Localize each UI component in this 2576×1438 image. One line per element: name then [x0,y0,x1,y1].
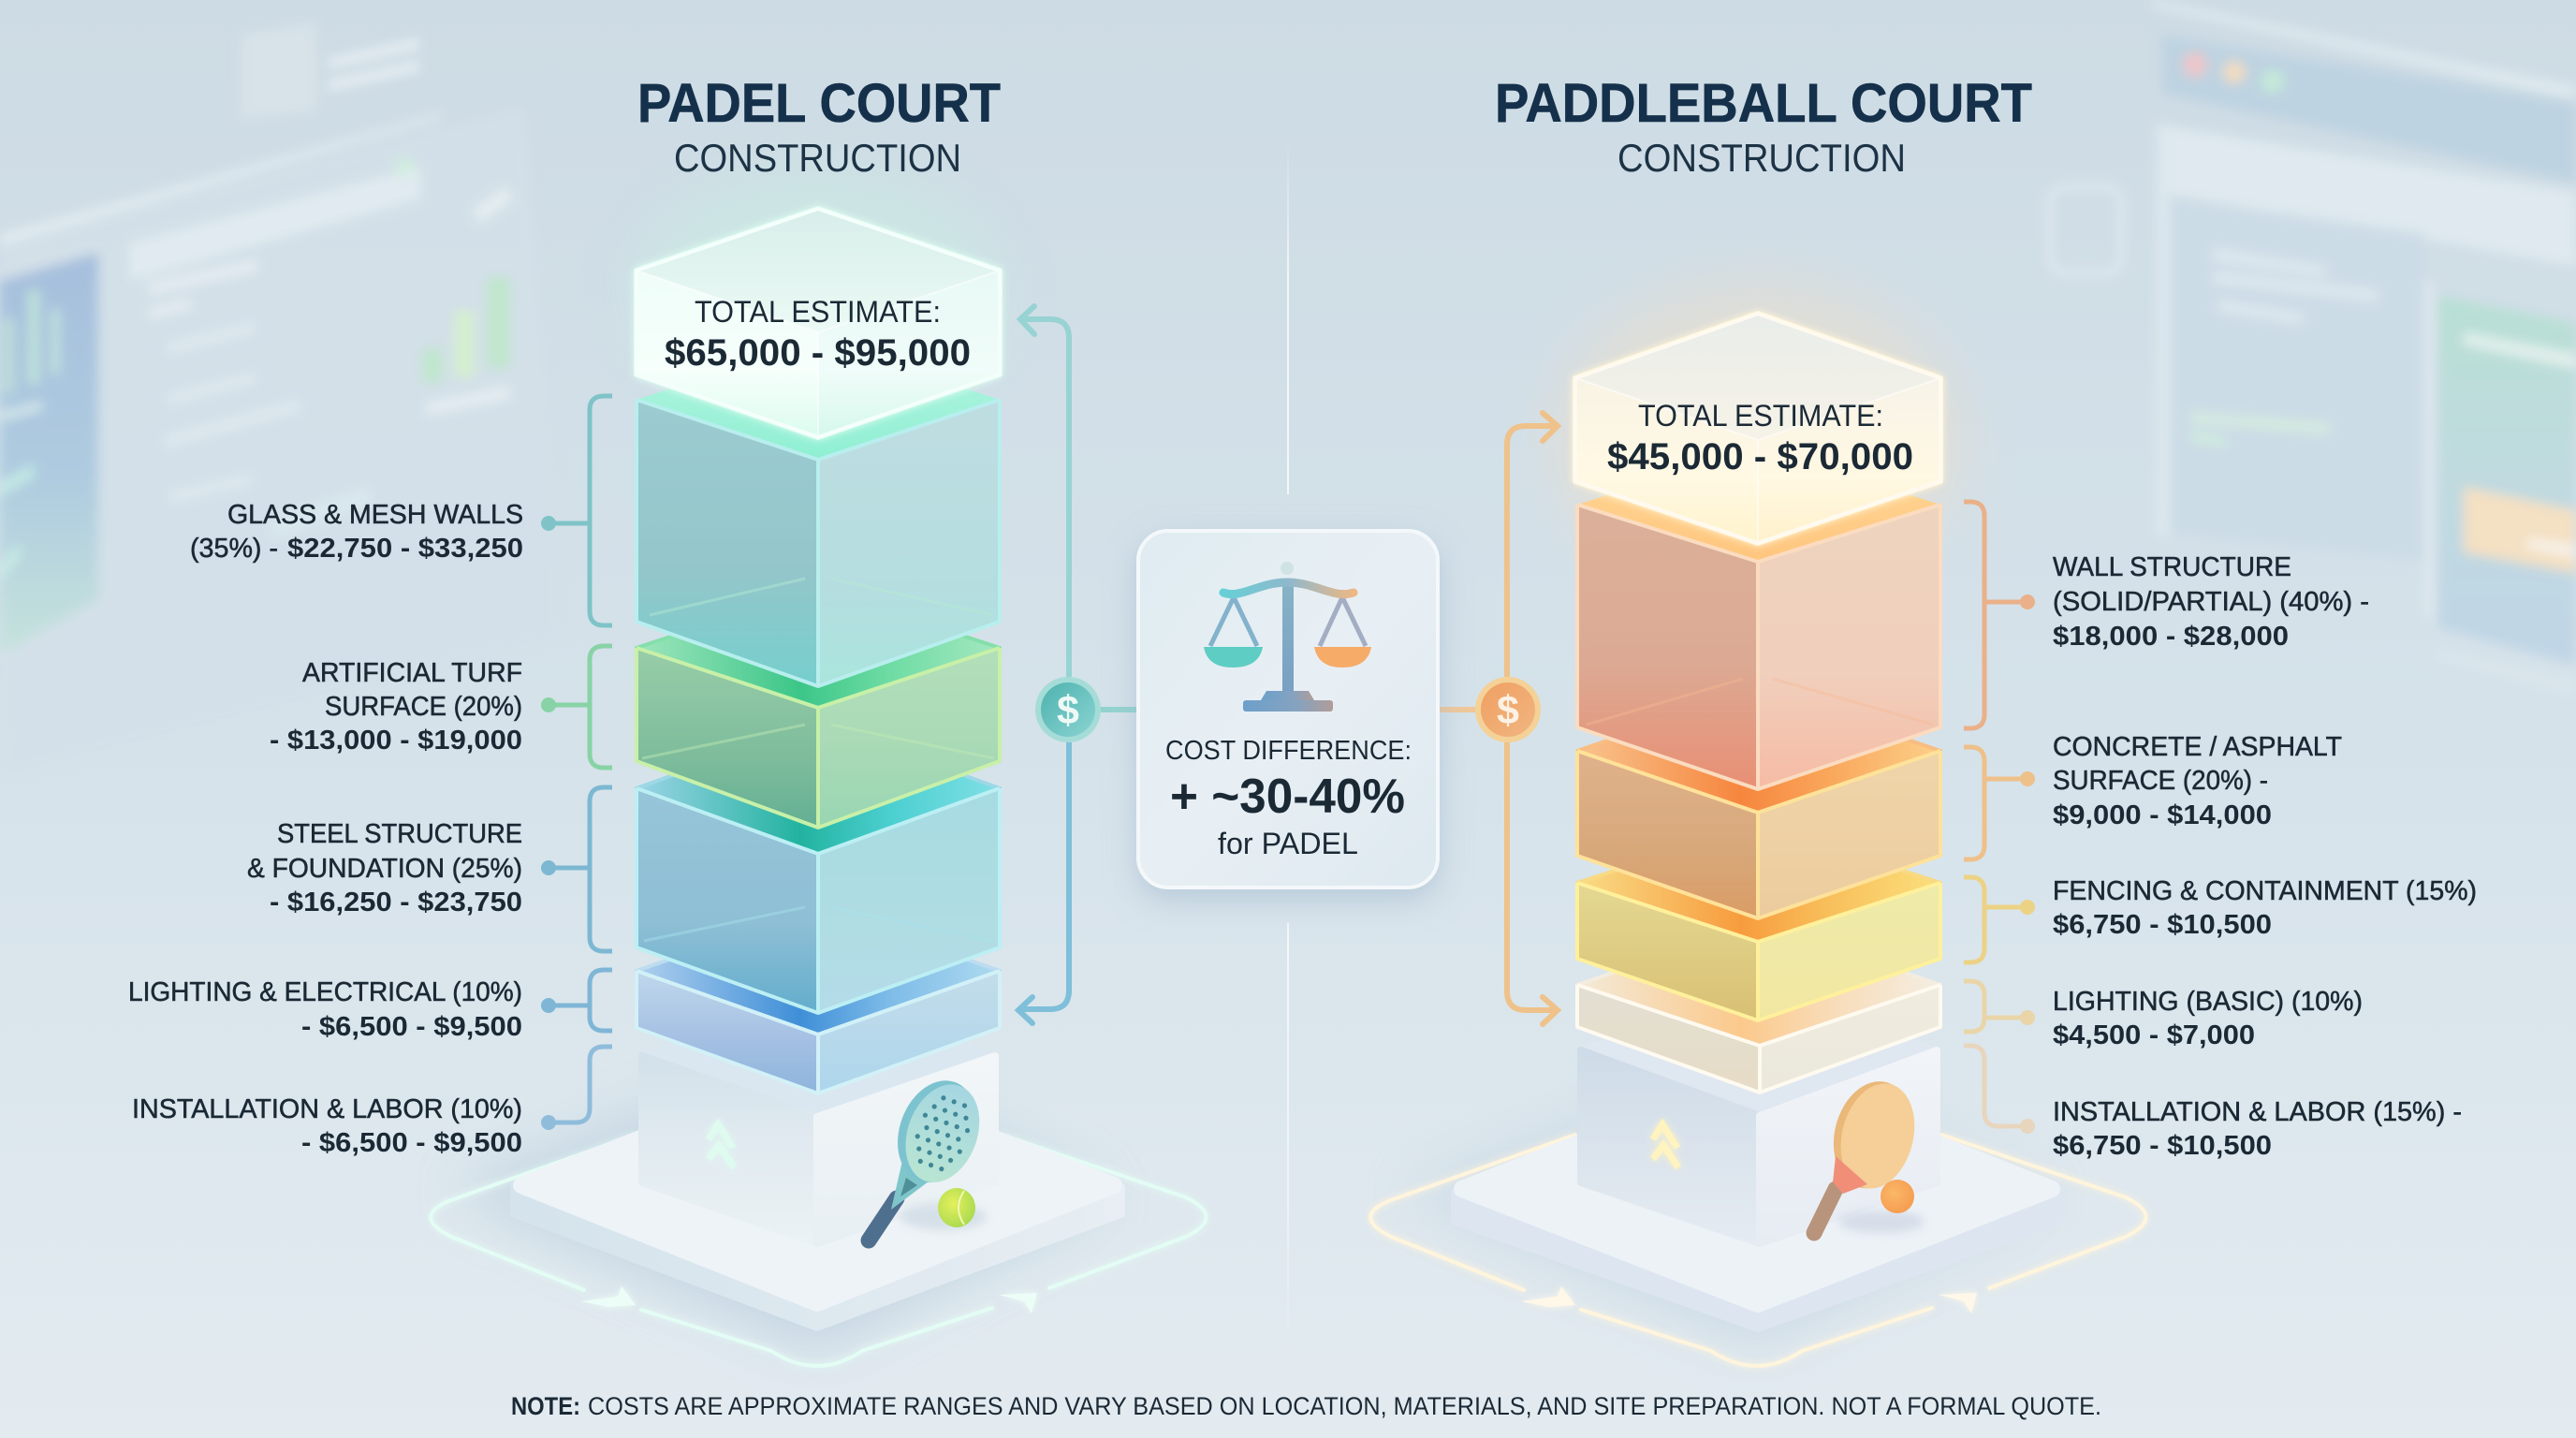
tower: padel [431,209,1206,1366]
platform shadow [1404,1058,2050,1348]
callout: steel structure: STEEL STRUCTURE [277,819,522,849]
title: paddleball: PADDLEBALL COURT [1495,73,2032,134]
callout: steel structure [247,787,612,951]
blurred dashboard: right [2050,0,2576,697]
title: padel: PADEL COURT [637,73,1001,134]
callout: fencing and containment: FENCING & CONTAINMENT (15%) [2053,876,2477,906]
callout: wall structure: (SOLID/PARTIAL) (40%) - [2053,587,2369,617]
layer: glass walls [637,340,1000,686]
callout: basic lighting: LIGHTING (BASIC) (10%) [2053,987,2363,1017]
cap: total estimate: $65,000 - $95,000 [665,332,971,374]
footnote: COSTS ARE APPROXIMATE RANGES AND VARY BASED ON LOCATION, MATERIALS, AND SITE PREPARATION. NOT A FORMAL QUOTE. [588,1392,2101,1420]
callout: installation and labor: $6,750 - $10,500 [2053,1131,2272,1161]
icon: dollar coin orange [1475,677,1541,742]
icon: up chevrons [1653,1124,1678,1167]
callout: lighting and electrical [128,970,612,1042]
callout: glass and mesh walls: (35%) - [190,534,278,564]
tower glow: padel [631,169,1005,412]
text: cost difference: COST DIFFERENCE: [1165,736,1412,766]
callout: fencing and containment: $6,750 - $10,500 [2053,910,2272,940]
connector: paddleball coin to card [1438,707,1475,712]
callout: concrete surface: SURFACE (20%) - [2053,766,2268,796]
title: paddleball: CONSTRUCTION [1617,136,1906,180]
callout: concrete surface [1964,732,2342,859]
base block [1581,989,1937,1243]
connector: padel coin to card [1101,707,1138,712]
icon: padel racket and ball [869,1069,993,1240]
callout: wall structure: $18,000 - $28,000 [2053,622,2289,652]
callout: basic lighting [1964,981,2363,1050]
callout: installation and labor: - $6,500 - $9,500 [301,1128,522,1158]
callout: installation and labor: INSTALLATION & LABOR (10%) [132,1094,522,1124]
layer: lighting [1577,922,1940,1093]
text: for padel: for PADEL [1218,827,1358,860]
tower: paddleball [1370,314,2145,1366]
centre divider [1287,137,1289,1363]
callout: wall structure [1964,502,2369,728]
side arrows: padel range [1018,306,1069,1023]
title: paddleball [1495,73,2032,180]
cap: total estimate: $45,000 - $70,000 [1607,436,1913,477]
layer: concrete [1577,689,1940,918]
icon: dollar coin teal [1035,677,1101,742]
value: cost difference: + ~30-40% [1170,770,1405,824]
footnote: NOTE: [511,1392,580,1420]
callout: concrete surface: $9,000 - $14,000 [2053,800,2272,830]
callout: glass and mesh walls: GLASS & MESH WALLS [227,500,523,530]
layer: turf [637,588,1000,828]
title: padel [637,73,1001,180]
cap: total estimate [637,209,1000,437]
callout: artificial turf: ARTIFICIAL TURF [302,658,522,688]
layer: lighting [637,908,1000,1093]
callout: lighting and electrical: - $6,500 - $9,500 [301,1012,522,1042]
cap: total estimate [1575,314,1940,543]
callout: steel structure: & FOUNDATION (25%) [247,854,522,884]
cap: total estimate: TOTAL ESTIMATE: [1638,399,1883,433]
platform shadow [459,1058,1105,1348]
callout: wall structure: WALL STRUCTURE [2053,552,2291,582]
platform [512,1069,1123,1329]
callout: artificial turf: - $13,000 - $19,000 [270,726,522,756]
callout: glass and mesh walls: $22,750 - $33,250 [287,534,523,564]
blurred dashboard: left [0,21,562,777]
layer: wall structure [1577,448,1940,789]
callout: lighting and electrical: LIGHTING & ELECTRICAL (10%) [128,977,522,1007]
layer: fencing [1577,824,1940,1020]
callout: glass and mesh walls [190,396,612,625]
title: padel: CONSTRUCTION [674,136,961,180]
glowing ring with arrows [431,1135,1206,1366]
callout: steel structure: - $16,250 - $23,750 [270,888,522,917]
panel: cost difference [1138,531,1438,888]
tower glow: paddleball [1552,281,1964,599]
icon: dollar coin orange: $ [1497,688,1519,733]
callout: installation and labor: INSTALLATION & LABOR (15%) - [2053,1097,2462,1127]
platform [1453,1072,2061,1330]
callout: artificial turf: SURFACE (20%) [325,692,522,722]
icon: up chevrons [709,1124,734,1167]
icon: dollar coin teal: $ [1057,688,1079,733]
callout: fencing and containment [1964,876,2477,962]
layer: steel [637,723,1000,1013]
callout: installation and labor [1964,1046,2462,1161]
glowing ring with arrows [1370,1135,2145,1366]
callout: installation and labor [132,1047,612,1158]
callout: concrete surface: CONCRETE / ASPHALT [2053,732,2342,762]
icon: balance scale [1204,562,1371,712]
icon: paddleball paddle and ball [1814,1073,1925,1233]
cap: total estimate: TOTAL ESTIMATE: [695,295,941,329]
base block [642,996,995,1243]
callout: artificial turf [270,646,612,768]
side arrows: paddleball range [1507,413,1558,1024]
callout: basic lighting: $4,500 - $7,000 [2053,1020,2255,1050]
